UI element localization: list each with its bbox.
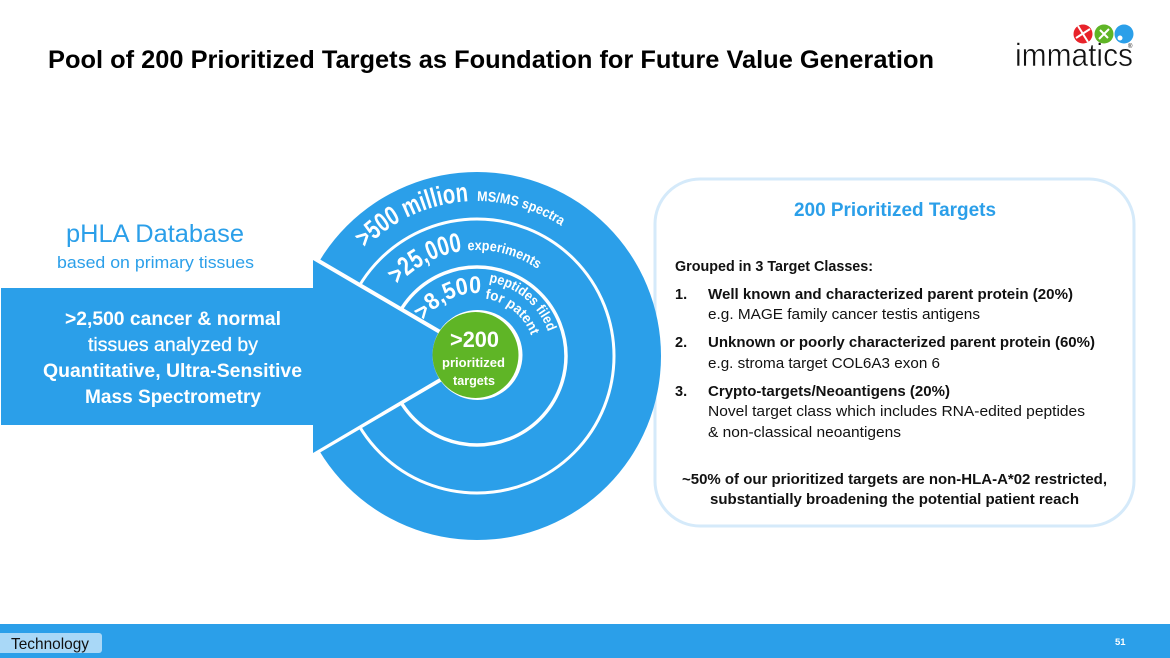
section tab label: Technology — [11, 636, 89, 653]
class 2 example: e.g. stroma target COL6A3 exon 6 — [708, 356, 940, 372]
badge label line 1: prioritized — [442, 355, 505, 370]
arrow shape — [1, 260, 477, 453]
class 1 example: e.g. MAGE family cancer testis antigens — [708, 307, 980, 323]
outer blue disc — [293, 172, 661, 540]
class 3 number: 3. — [675, 384, 687, 400]
ring divider: peptides — [388, 267, 566, 445]
logo: immatics — [1015, 24, 1134, 73]
center badge: 200 prioritized targets — [432, 310, 522, 400]
concentric ring diagram — [320, 172, 661, 540]
arrow text line 3: Quantitative, Ultra-Sensitive — [43, 361, 302, 382]
ring divider: experiments — [340, 219, 614, 493]
footer bar — [0, 624, 1170, 658]
page number: 51 — [1115, 637, 1126, 648]
class 3 title: Crypto-targets/Neoantigens (20%) — [708, 384, 950, 400]
arrow text line 2: tissues analyzed by — [88, 335, 258, 356]
class 2 number: 2. — [675, 335, 687, 351]
badge label line 2: targets — [453, 373, 495, 388]
badge number: >200 — [450, 327, 499, 352]
panel heading: 200 Prioritized Targets — [794, 200, 996, 221]
heading: pHLA Database: pHLA Database — [66, 220, 244, 248]
class 3 description line 2: & non-classical neoantigens — [708, 425, 901, 441]
panel conclusion line 1: ~50% of our prioritized targets are non-HLA-A*02 restricted, — [682, 472, 1107, 488]
label: experiments: experiments — [468, 242, 540, 268]
arrow text line 1: >2,500 cancer & normal — [65, 309, 281, 330]
icon: blue circle — [1114, 24, 1134, 44]
icon: green circle — [1094, 24, 1114, 44]
label: for patent: for patent — [486, 289, 539, 336]
white wedge cutout — [280, 236, 485, 476]
badge green disc — [432, 312, 518, 398]
arrow: pHLA database — [1, 260, 477, 453]
arrow text line 4: Mass Spectrometry — [85, 387, 261, 408]
logo registered mark: ® — [1128, 43, 1133, 50]
label: MS/MS spectra: MS/MS spectra — [478, 191, 564, 226]
class 1 title: Well known and characterized parent protein (20%) — [708, 287, 1073, 303]
icon: red circle — [1074, 24, 1092, 44]
footer background — [0, 624, 1170, 658]
label: 500 million: >500 million — [354, 186, 468, 246]
panel intro: Grouped in 3 Target Classes: — [675, 259, 873, 275]
badge white ring — [432, 310, 522, 400]
panel: 200 prioritized targets — [655, 179, 1134, 526]
title: Pool of 200 Prioritized Targets as Foundation for Future Value Generation — [48, 46, 934, 74]
section tab — [0, 633, 102, 653]
class 1 number: 1. — [675, 287, 687, 303]
class 3 description line 1: Novel target class which includes RNA-edited peptides — [708, 404, 1085, 420]
class 2 title: Unknown or poorly characterized parent protein (60%) — [708, 335, 1095, 351]
logo wordmark: immatics — [1015, 37, 1133, 73]
label: peptides filed: peptides filed — [489, 274, 558, 331]
label: 25,000: >25,000 — [387, 233, 460, 284]
subheading: based on primary tissues: based on primary tissues — [57, 253, 254, 272]
panel conclusion line 2: substantially broadening the potential patient reach — [710, 492, 1079, 508]
panel frame — [655, 179, 1134, 526]
label: 8,500: >8,500 — [414, 276, 480, 320]
